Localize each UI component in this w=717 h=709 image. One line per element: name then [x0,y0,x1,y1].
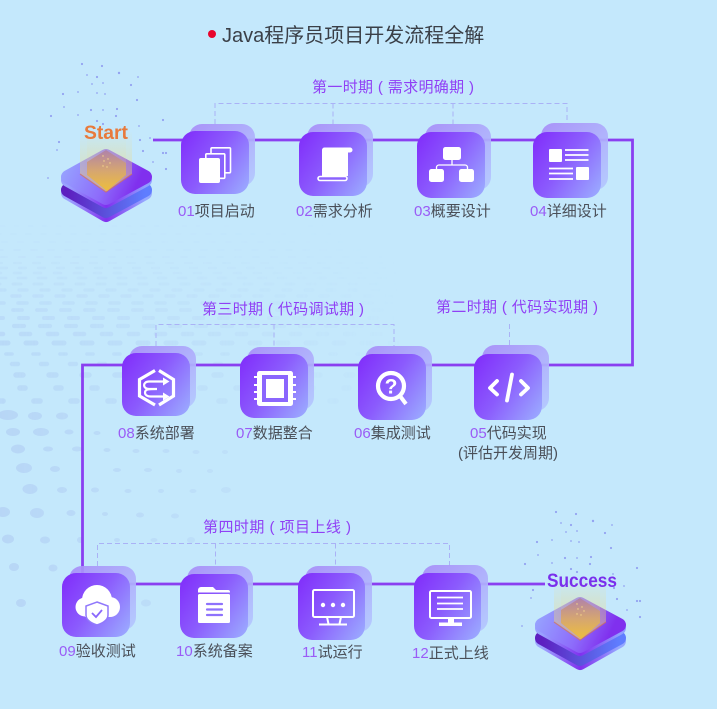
step 11 [298,566,372,661]
step 04 [530,123,608,220]
start platform [47,63,167,215]
halftone dot pattern [0,294,210,607]
step 03 [414,124,491,220]
step 10: 10系统备案 [176,642,253,660]
step 09 [59,566,136,660]
step 07 [236,347,314,442]
step 05: (评估开发周期) [458,445,558,462]
period 3 bracket [156,300,394,346]
period 1 bracket [215,78,567,124]
step 01: 01项目启动 [178,203,255,220]
flow connector line [82,140,632,584]
start platform: Start [84,123,129,144]
step 02: 02需求分析 [296,203,373,220]
step 05: 05代码实现 [470,425,547,442]
success platform: Success [547,571,617,592]
step 08 [118,346,196,442]
period 4 bracket: 第四时期 ( 项目上线 ) [203,518,351,536]
step 06: 06集成测试 [354,425,431,442]
step 05 [458,345,558,462]
step 11: 11试运行 [302,644,363,661]
step 06 [354,346,432,442]
step 02 [296,124,373,220]
period 4 bracket [98,518,450,566]
title: Java程序员项目开发流程全解 [222,24,484,47]
step 08: 08系统部署 [118,425,195,442]
step 04: 04详细设计 [530,203,607,220]
step 12 [412,565,489,662]
period 2 bracket: 第二时期 ( 代码实现期 ) [436,298,598,316]
period 1 bracket: 第一时期 ( 需求明确期 ) [312,78,474,96]
period 3 bracket: 第三时期 ( 代码调试期 ) [202,300,364,318]
step 03: 03概要设计 [414,203,491,220]
success platform [521,511,641,663]
step 06: ? [385,376,397,398]
step 10 [176,566,253,660]
step 01 [178,124,255,220]
step 09: 09验收测试 [59,643,136,660]
step 12: 12正式上线 [412,645,489,662]
step 07: 07数据整合 [236,425,313,442]
